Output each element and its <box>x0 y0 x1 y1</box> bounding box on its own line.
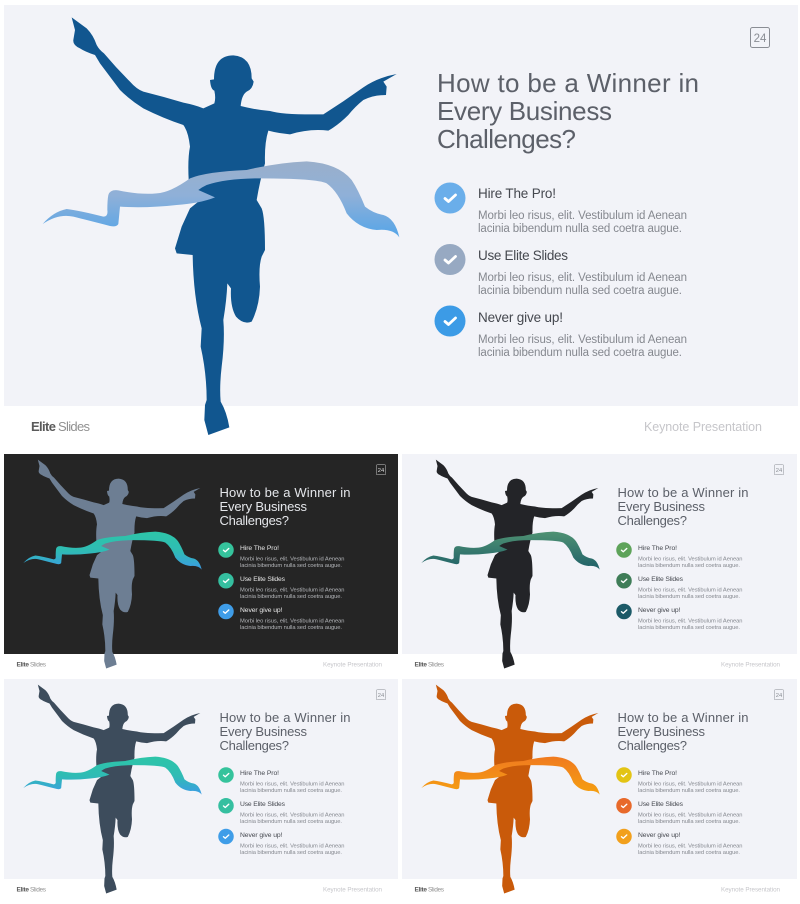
slide content: Morbi leo risus, elit. Vestibulum id Aenean <box>240 812 344 818</box>
footer <box>16 886 383 894</box>
slide content: Morbi leo risus, elit. Vestibulum id Aenean <box>240 844 344 850</box>
footer: Keynote Presentation <box>721 886 781 894</box>
finish ribbon <box>43 161 399 237</box>
slide content: Morbi leo risus, elit. Vestibulum id Aenean <box>240 618 344 624</box>
slide content: How to be a Winner in <box>220 710 350 725</box>
slide content: Challenges? <box>618 513 687 528</box>
slide content: lacinia bibendum nulla sed coetra augue. <box>638 788 740 794</box>
slide content: Morbi leo risus, elit. Vestibulum id Aenean <box>240 588 344 594</box>
slide content: lacinia bibendum nulla sed coetra augue. <box>240 819 342 825</box>
footer: Slides <box>30 886 47 894</box>
slide content: lacinia bibendum nulla sed coetra augue. <box>240 625 342 631</box>
slide content: Morbi leo risus, elit. Vestibulum id Aenean <box>638 844 742 850</box>
slide content: Never give up! <box>240 832 283 839</box>
footer brand: Elite <box>31 419 56 434</box>
slide content: lacinia bibendum nulla sed coetra augue. <box>240 563 342 569</box>
item: Hire The Pro: Hire The Pro! <box>478 186 556 201</box>
slide content: Use Elite Slides <box>638 576 684 583</box>
slide content: Every Business <box>220 499 308 514</box>
slide content: lacinia bibendum nulla sed coetra augue. <box>638 819 740 825</box>
slide content: 24 <box>776 468 783 474</box>
footer: Slides <box>30 662 47 668</box>
slide content: Morbi leo risus, elit. Vestibulum id Aenean <box>240 556 344 562</box>
slide content: 24 <box>776 693 783 699</box>
item: Never give up <box>434 306 687 359</box>
panel: green slide <box>402 454 797 668</box>
slide content: Morbi leo risus, elit. Vestibulum id Aenean <box>638 618 742 624</box>
page number <box>750 28 770 48</box>
slide content: Never give up! <box>240 607 283 614</box>
item: Use Elite Slides: Use Elite Slides <box>478 248 568 263</box>
slide content: Hire The Pro! <box>240 545 279 552</box>
slide content: Use Elite Slides <box>638 801 684 808</box>
item: Hire The Pro: Morbi leo risus, elit. Vestibulum id Aenean <box>478 210 687 222</box>
slide content: Morbi leo risus, elit. Vestibulum id Aenean <box>240 782 344 788</box>
footer <box>414 886 781 894</box>
slide content: Hire The Pro! <box>240 770 279 777</box>
title: Challenges? <box>437 124 576 154</box>
slide content <box>616 690 784 856</box>
item: Never give up: Morbi leo risus, elit. Vestibulum id Aenean <box>478 334 687 346</box>
slide content: lacinia bibendum nulla sed coetra augue. <box>638 625 740 631</box>
slide content: lacinia bibendum nulla sed coetra augue. <box>240 594 342 600</box>
slide content: Morbi leo risus, elit. Vestibulum id Aenean <box>638 812 742 818</box>
footer: Elite <box>414 886 427 894</box>
panel: slate slide <box>4 679 398 894</box>
footer <box>16 662 383 668</box>
panel: dark slide <box>4 454 398 668</box>
slide content: lacinia bibendum nulla sed coetra augue. <box>638 594 740 600</box>
slide background <box>4 5 798 406</box>
footer: Elite <box>16 886 29 894</box>
runner silhouette <box>72 17 397 435</box>
slide content <box>218 465 386 631</box>
item: Use Elite Slides: Morbi leo risus, elit. Vestibulum id Aenean <box>478 272 687 284</box>
footer brand <box>31 419 90 434</box>
runner silhouette <box>23 685 202 893</box>
slide content: Challenges? <box>220 738 289 753</box>
slide content: Never give up! <box>638 832 681 839</box>
footer brand: Slides <box>58 419 90 434</box>
slide content: Challenges? <box>220 513 289 528</box>
footer label: Keynote Presentation <box>644 420 762 434</box>
slide content: Use Elite Slides <box>240 801 286 808</box>
slide background <box>402 679 797 879</box>
footer: Keynote Presentation <box>323 662 383 668</box>
slide content: Hire The Pro! <box>638 770 677 777</box>
slide background <box>4 454 398 654</box>
slide background <box>402 454 797 654</box>
slide content: Challenges? <box>618 738 687 753</box>
slide content: Every Business <box>618 724 706 739</box>
slide content: How to be a Winner in <box>618 485 748 500</box>
item: Never give up: lacinia bibendum nulla sed coetra augue. <box>478 347 682 359</box>
footer: Elite <box>16 662 29 668</box>
slide content: lacinia bibendum nulla sed coetra augue. <box>240 850 342 856</box>
footer: Slides <box>428 662 445 668</box>
slide content: Morbi leo risus, elit. Vestibulum id Aenean <box>638 588 742 594</box>
slide content: Hire The Pro! <box>638 545 677 552</box>
item: Never give up: Never give up! <box>478 310 563 325</box>
title: How to be a Winner in <box>437 68 699 98</box>
slide content: lacinia bibendum nulla sed coetra augue. <box>638 563 740 569</box>
item: Use Elite Slides <box>434 244 687 297</box>
footer <box>414 662 781 668</box>
item: Hire The Pro <box>434 182 687 235</box>
slide content: Morbi leo risus, elit. Vestibulum id Aenean <box>638 556 742 562</box>
slide content: lacinia bibendum nulla sed coetra augue. <box>240 788 342 794</box>
slide content <box>616 465 784 631</box>
footer: Keynote Presentation <box>721 662 781 668</box>
slide content: Never give up! <box>638 607 681 614</box>
runner silhouette <box>421 460 600 668</box>
item: Use Elite Slides: lacinia bibendum nulla sed coetra augue. <box>478 285 682 297</box>
slide content: How to be a Winner in <box>220 485 350 500</box>
title <box>437 68 699 154</box>
slide content: Use Elite Slides <box>240 576 286 583</box>
footer: Slides <box>428 886 445 894</box>
runner silhouette <box>421 685 600 893</box>
slide content: Morbi leo risus, elit. Vestibulum id Aenean <box>638 782 742 788</box>
slide background <box>4 679 398 879</box>
footer: Keynote Presentation <box>323 886 383 894</box>
panel: main blue slide <box>4 5 798 435</box>
slide content: Every Business <box>220 724 308 739</box>
item: Hire The Pro: lacinia bibendum nulla sed coetra augue. <box>478 223 682 235</box>
panel: orange slide <box>402 679 797 894</box>
footer: Elite <box>414 662 427 668</box>
slide content: 24 <box>378 468 385 474</box>
title: Every Business <box>437 96 612 126</box>
runner silhouette <box>23 460 202 668</box>
slide content: lacinia bibendum nulla sed coetra augue. <box>638 850 740 856</box>
slide content: How to be a Winner in <box>618 710 748 725</box>
slide content: 24 <box>378 693 385 699</box>
slide content: Every Business <box>618 499 706 514</box>
slide content <box>218 690 386 856</box>
page number: 24 <box>754 33 767 45</box>
